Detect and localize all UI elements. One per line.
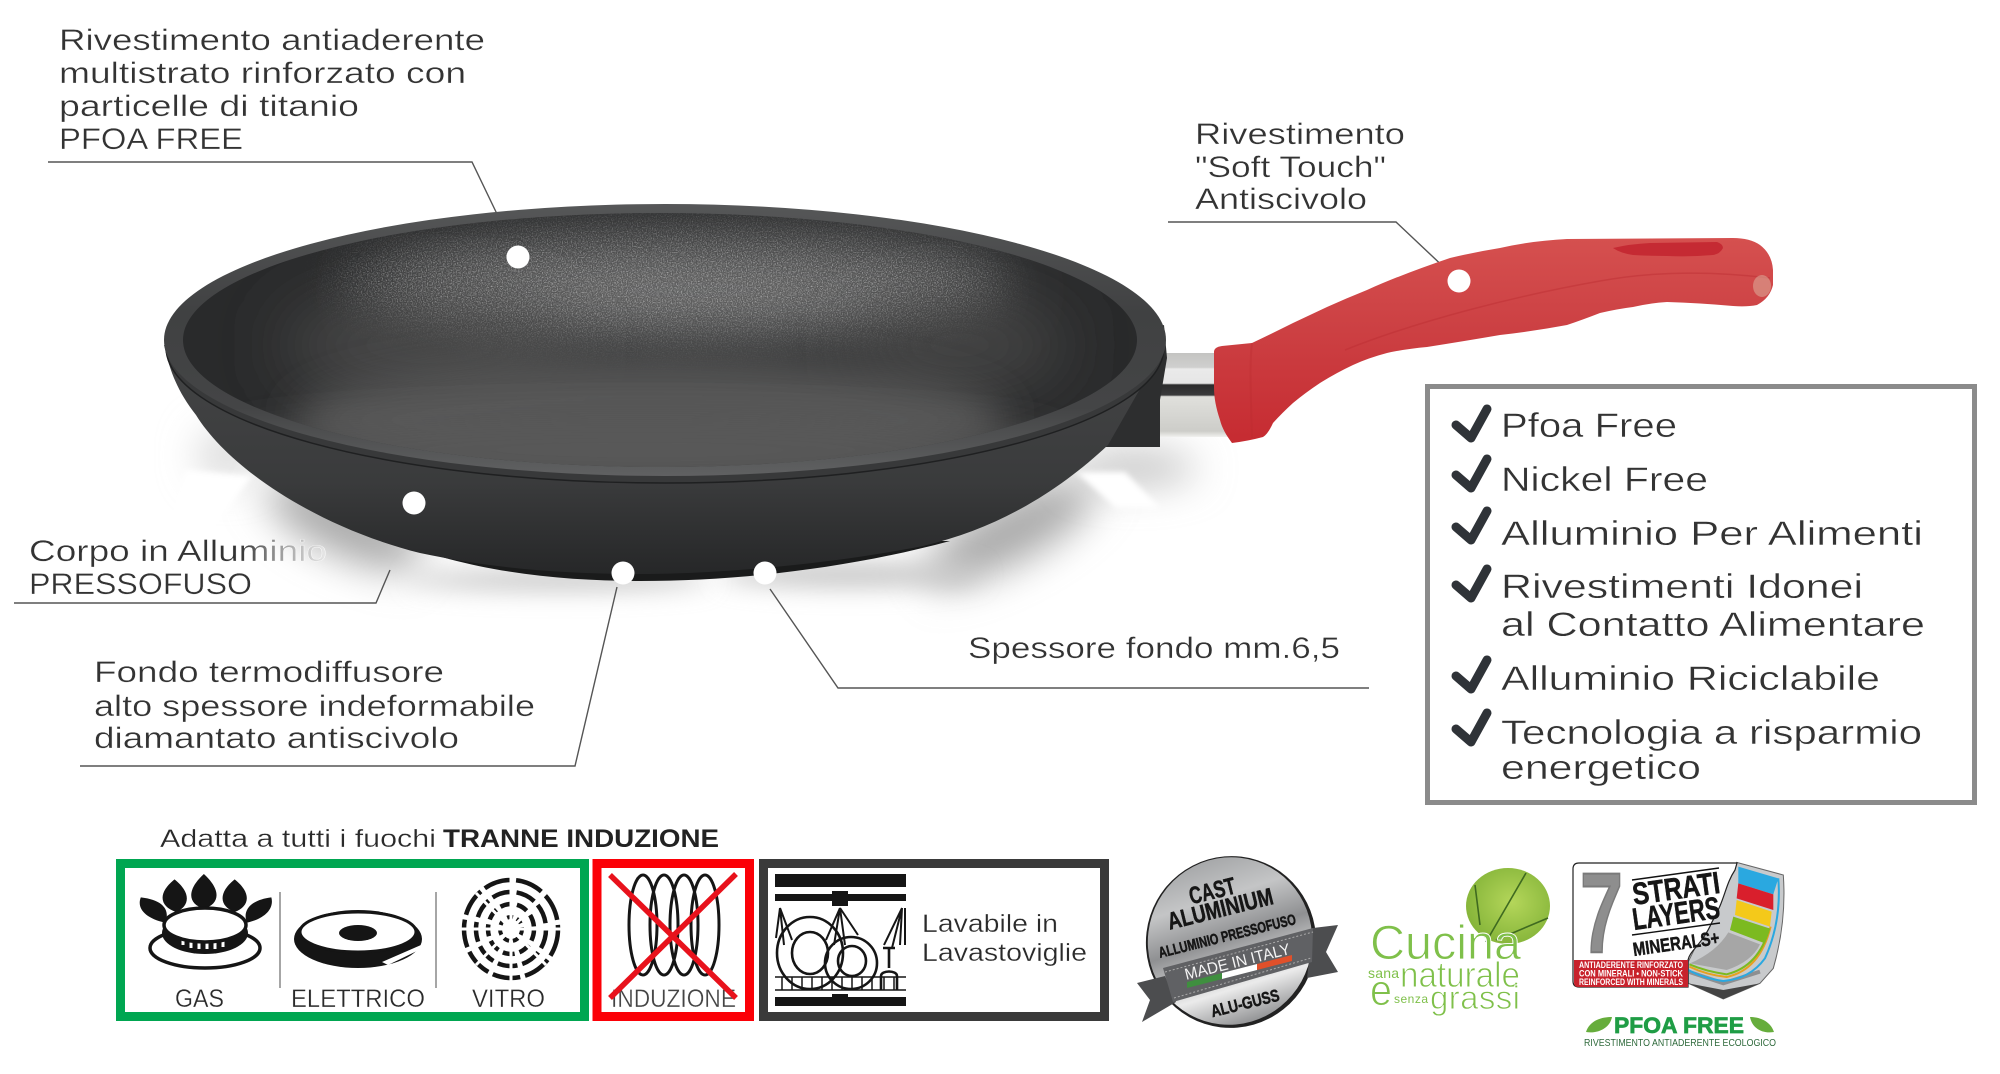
check: Tecnologia a risparmio — [1456, 713, 1922, 787]
badge: cast aluminium — [1124, 834, 1338, 1050]
icon: green leaves — [1586, 1017, 1774, 1032]
layered coating swatch — [1688, 862, 1784, 999]
callout: heat diffusing base — [80, 587, 617, 766]
logo: cucina sana naturale: sana — [1368, 965, 1399, 981]
panel: not for induction — [597, 864, 750, 1016]
badge: pfoa free: PFOA FREE — [1614, 1013, 1744, 1038]
heading: suitable for all hobs: TRANNE INDUZIONE — [443, 825, 719, 853]
panel: dishwasher safe — [764, 864, 1104, 1016]
reflection shadow under the pan — [165, 429, 1197, 603]
badge: 7 layers minerals — [1573, 850, 1784, 999]
callout: die-cast body: PRESSOFUSO — [29, 568, 252, 601]
red banner: ANTIADERENTE RINFORZATO — [1579, 960, 1683, 970]
check: Pfoa Free: Pfoa Free — [1501, 407, 1677, 445]
check: Tecnologia a risparmio: energetico — [1501, 749, 1701, 787]
callout: non-stick coating: multistrato rinforzato con — [59, 57, 466, 90]
icon: induction coil — [629, 875, 719, 975]
numeral seven: 7 — [1580, 850, 1623, 977]
callout: non-stick coating: Rivestimento antiaderente — [59, 24, 485, 57]
check: Tecnologia a risparmio: Tecnologia a risparmio — [1501, 714, 1922, 752]
badge: pfoa free — [1584, 1013, 1776, 1049]
icon: dishwasher — [775, 874, 906, 1006]
badge: cast aluminium: ALU-GUSS — [1209, 986, 1281, 1021]
callout: non-stick coating: particelle di titanio — [59, 90, 359, 123]
badge: 7 layers minerals: MINERALS+ — [1632, 928, 1721, 961]
badge: cast aluminium: ALUMINIUM — [1165, 883, 1276, 936]
badge: cast aluminium: CAST — [1186, 873, 1239, 910]
label: glass ceramic: VITRO — [472, 985, 545, 1013]
logo: cucina sana naturale — [1368, 868, 1550, 1016]
callout dot: handle — [1448, 270, 1470, 292]
check: Rivestimenti Idonei: al Contatto Alimentare — [1501, 606, 1925, 644]
red cross — [610, 874, 736, 998]
ribbon tails — [1137, 925, 1338, 1022]
logo: cucina sana naturale: grassi — [1430, 979, 1520, 1016]
callout dot: thickness — [754, 562, 776, 584]
callout: soft touch handle: "Soft Touch" — [1195, 151, 1386, 184]
check: Alluminio Per Alimenti: Alluminio Per Alimenti — [1501, 515, 1923, 553]
check: Nickel Free: Nickel Free — [1501, 461, 1708, 499]
icon: gas burner — [140, 874, 272, 968]
check: Rivestimenti Idonei: Rivestimenti Idonei — [1501, 568, 1863, 606]
callout dot: base — [612, 562, 634, 584]
badge: 7 layers minerals: STRATI — [1630, 865, 1722, 912]
ribbon band — [1163, 928, 1313, 1002]
callout: base thickness: Spessore fondo mm.6,5 — [968, 632, 1340, 665]
callout: heat diffusing base: Fondo termodiffusore — [94, 656, 444, 689]
handle hanging hole — [1613, 242, 1723, 256]
logo: cucina sana naturale: senza — [1394, 992, 1428, 1006]
pan base — [392, 540, 950, 581]
logo: cucina sana naturale: e — [1370, 966, 1392, 1015]
check: Rivestimenti Idonei — [1456, 568, 1925, 644]
heading: suitable for all hobs — [160, 825, 719, 853]
callout: non-stick coating: PFOA FREE — [59, 123, 243, 156]
label: induction: INDUZIONE — [611, 985, 736, 1013]
text: dishwasher safe: Lavabile in — [922, 910, 1058, 938]
callout: non-stick coating — [48, 24, 497, 214]
logo: cucina sana naturale: Cucina — [1370, 917, 1521, 970]
check: Nickel Free — [1456, 459, 1708, 499]
badge: 7 layers minerals: LAYERS — [1630, 890, 1722, 937]
icon: glass ceramic hob — [458, 875, 564, 983]
check: Alluminio Riciclabile: Alluminio Riciclabile — [1501, 660, 1880, 698]
callout: die-cast body — [14, 535, 390, 603]
check: Alluminio Per Alimenti — [1456, 511, 1923, 553]
pan bracket — [1100, 325, 1167, 447]
callout dot: body — [402, 492, 426, 514]
badge: cast aluminium: MADE IN ITALY — [1183, 941, 1292, 984]
callout: soft touch handle: Antiscivolo — [1195, 183, 1367, 216]
pan body — [164, 345, 1165, 574]
check: Pfoa Free — [1456, 407, 1677, 445]
panel: compatible hobs — [120, 864, 584, 1016]
label: electric: ELETTRICO — [291, 985, 425, 1013]
text: dishwasher safe — [922, 910, 1087, 967]
label: gas: GAS — [175, 985, 224, 1013]
badge: pfoa free: RIVESTIMENTO ANTIADERENTE ECOLOGICO — [1584, 1038, 1776, 1049]
callout: heat diffusing base: alto spessore indeformabile — [94, 690, 535, 723]
pan rim — [164, 204, 1166, 476]
icon: electric plate — [294, 910, 422, 968]
icon: leaf — [1466, 868, 1550, 944]
pan interior — [180, 210, 1140, 482]
lower lip of rim — [166, 211, 1164, 483]
white label — [1573, 863, 1737, 987]
callout: soft touch handle: Rivestimento — [1195, 118, 1405, 151]
logo: cucina sana naturale: naturale — [1400, 954, 1520, 995]
red banner: CON MINERALI • NON-STICK — [1579, 968, 1683, 978]
panel: feature checklist — [1428, 386, 1974, 802]
heading: suitable for all hobs: Adatta a tutti i fuochi — [160, 825, 436, 853]
badge: cast aluminium: ALLUMINIO PRESSOFUSO — [1157, 911, 1298, 962]
pan handle — [1160, 238, 1773, 443]
callout: base thickness — [770, 589, 1369, 688]
pan illustration — [164, 204, 1773, 584]
callout dot: coating — [506, 246, 530, 268]
text: dishwasher safe: Lavastoviglie — [922, 939, 1087, 967]
callout: soft touch handle — [1168, 118, 1449, 272]
red banner — [1574, 960, 1688, 987]
callout: heat diffusing base: diamantato antiscivolo — [94, 722, 459, 755]
red banner: REINFORCED WITH MINERALS — [1579, 977, 1683, 987]
callout: die-cast body: Corpo in Alluminio — [29, 535, 327, 568]
